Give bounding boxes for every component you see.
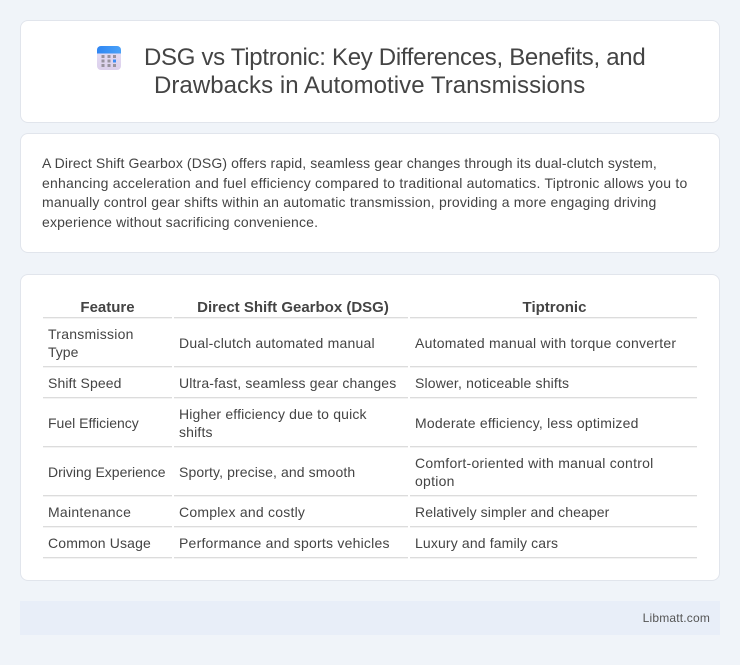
icon: calendar grid [97,46,121,70]
row: driving experience: option [415,473,455,489]
text block: summary: experience without sacrificing convenience. [42,214,318,230]
row: maintenance: Complex and costly [179,504,305,520]
panel: comparison table [20,274,720,581]
row: maintenance: Maintenance [48,504,131,520]
row: shift speed: Slower, noticeable shifts [415,375,569,391]
row: maintenance: Relatively simpler and cheaper [415,504,609,520]
row: transmission type: Automated manual with torque converter [415,335,676,351]
footer bar [20,601,720,635]
table header row: Feature [80,299,135,316]
row: driving experience: Driving Experience [48,464,166,480]
text block: summary [42,155,688,230]
row: common usage: Performance and sports vehicles [179,535,390,551]
row: driving experience: Comfort-oriented with manual control [415,455,654,471]
row: transmission type [48,326,676,360]
title: DSG vs Tiptronic: Key Differences, Benefits, and [144,44,645,71]
text block: summary: A Direct Shift Gearbox (DSG) offers rapid, seamless gear changes through its dual-clutch system, [42,155,657,171]
row: common usage: Common Usage [48,535,151,551]
row: transmission type: Dual-clutch automated manual [179,335,375,351]
title [144,44,645,99]
panel: intro text [20,133,720,253]
table header row: Tiptronic [523,299,586,316]
row: shift speed: Shift Speed [48,375,122,391]
row: driving experience [48,455,654,489]
title: Drawbacks in Automotive Transmissions [154,72,585,99]
row: fuel efficiency: Fuel Efficiency [48,415,139,431]
row: fuel efficiency [48,406,639,440]
row: fuel efficiency: Higher efficiency due to quick [179,406,367,422]
row: common usage: Luxury and family cars [415,535,558,551]
text block: summary: manually control gear shifts within an automatic transmission, providing a more engaging driving [42,194,657,210]
row: maintenance [48,504,610,520]
row: fuel efficiency: shifts [179,424,213,440]
row: shift speed [48,375,569,391]
row: transmission type: Type [48,344,78,360]
table header row: Direct Shift Gearbox (DSG) [197,299,389,316]
panel: header [20,20,720,123]
row: driving experience: Sporty, precise, and smooth [179,464,355,480]
row: fuel efficiency: Moderate efficiency, less optimized [415,415,639,431]
row: common usage [48,535,558,551]
row: transmission type: Transmission [48,326,134,342]
table header row [80,299,586,316]
text block: summary: enhancing acceleration and fuel efficiency compared to traditional automatics. Tiptronic allows you to [42,175,688,191]
row: shift speed: Ultra-fast, seamless gear changes [179,375,396,391]
footer credit: Libmatt.com [643,611,710,625]
